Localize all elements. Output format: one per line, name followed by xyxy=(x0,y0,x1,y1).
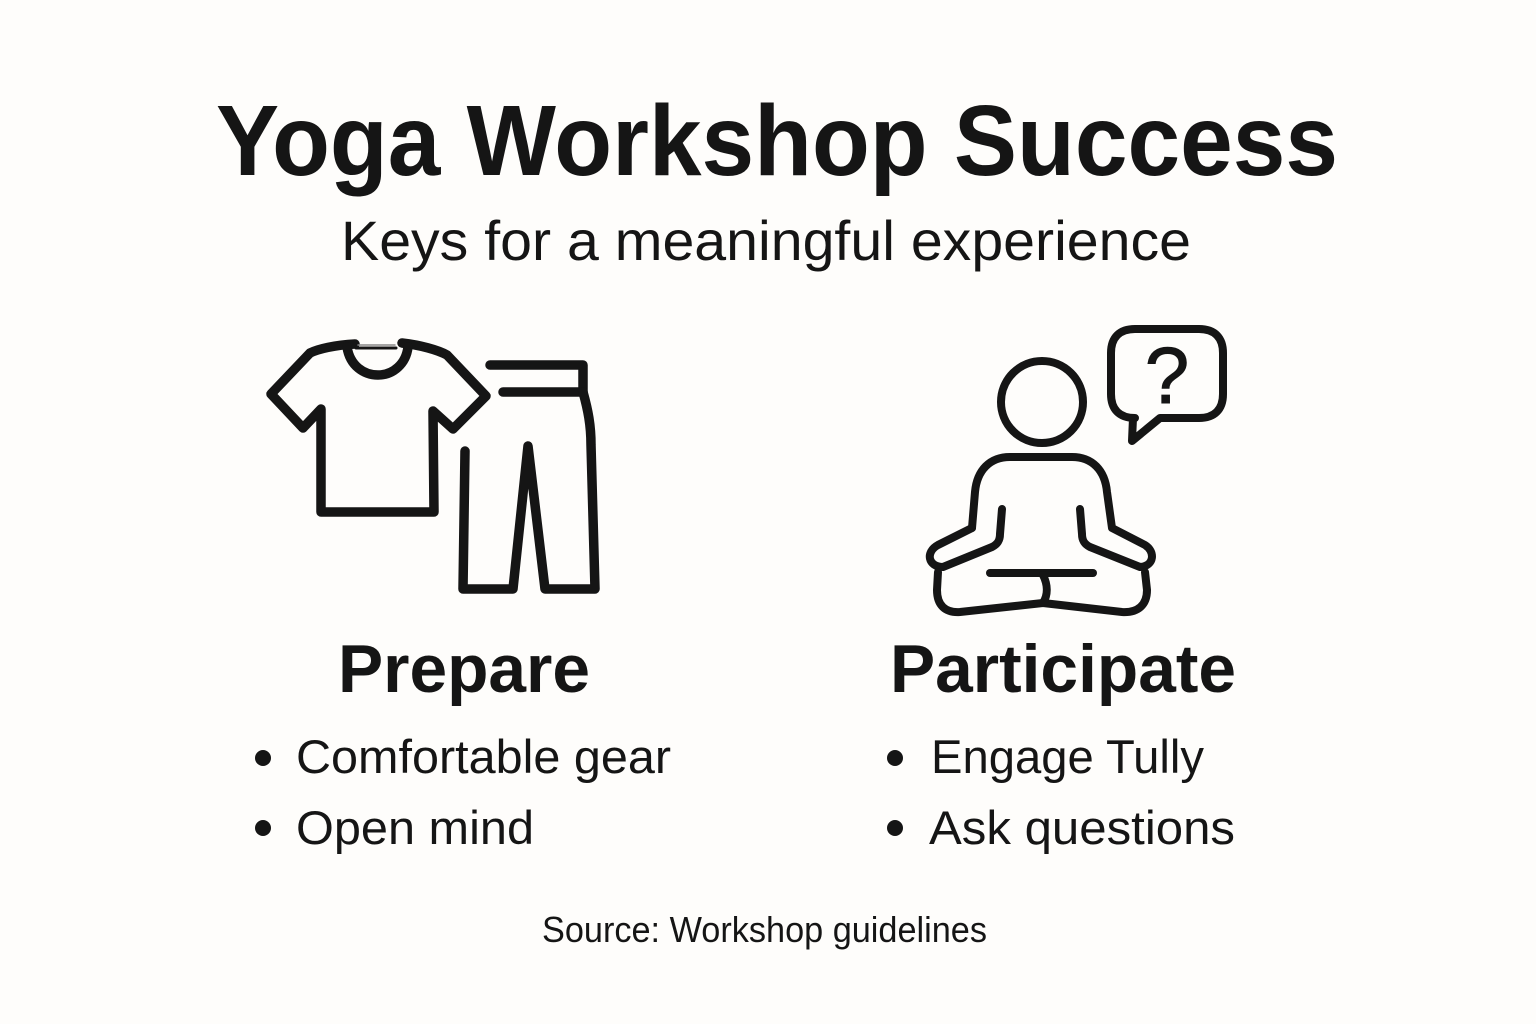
list: prepare items: Open mind xyxy=(296,801,534,854)
heading: prepare: Prepare xyxy=(338,631,590,707)
list: prepare items: Comfortable gear xyxy=(296,730,671,783)
list: participate items: Engage Tully xyxy=(931,730,1204,783)
subtitle: Keys for a meaningful experience xyxy=(341,209,1191,272)
icon: question speech bubble: ? xyxy=(1145,331,1189,420)
list: participate items xyxy=(887,730,1235,854)
panel: prepare xyxy=(255,343,671,854)
icon: t-shirt xyxy=(271,343,486,512)
icon: question speech bubble xyxy=(1111,329,1223,441)
panel: participate xyxy=(887,329,1236,854)
icon: meditating person xyxy=(930,361,1152,612)
list: participate items: Ask questions xyxy=(929,801,1235,854)
title: Yoga Workshop Success xyxy=(216,85,1338,197)
source note: Source: Workshop guidelines xyxy=(542,909,987,950)
icon: yoga pants xyxy=(463,365,595,589)
list: prepare items xyxy=(255,730,671,854)
heading: participate: Participate xyxy=(890,631,1236,707)
